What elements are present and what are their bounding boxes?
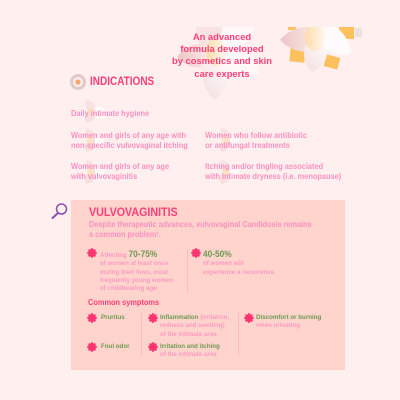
tagline heading: An advanced [193,30,251,42]
symptom: foul odor: Foul odor [100,342,129,350]
indication: vulvovaginitis: Women and girls of any age [71,162,169,170]
small flower 1 [85,99,105,123]
symptom: inflammation: Inflammation (irritation, [160,314,229,321]
symptom: foul odor [87,342,130,352]
indication: non-specific itching: non-specific vulvovaginal itching [71,140,188,150]
stat text: of childbearing age. [100,285,158,292]
stat text: of women will [203,260,244,267]
symptom: discomfort or burning [244,313,321,329]
panel: vulvovaginitis [71,200,345,370]
symptom: pruritus [87,313,124,323]
stat: 40-50% [191,248,276,276]
symptom: irritation and itching [148,342,220,358]
stat text: 40-50% [203,249,232,259]
indication: non-specific itching [71,130,188,150]
stat: 70-75% [87,248,173,292]
symptom: pruritus: Pruritus [100,314,124,321]
panel intro: a common problem¹. [89,230,161,238]
stat text: Affecting 70-75% [100,249,157,259]
flower: top right [280,23,363,72]
symptom: irritation and itching: Irritation and itching [160,342,220,350]
decorative flowers [84,27,362,184]
stat bullet [87,248,97,258]
icon: indications flower [70,74,86,90]
heading: common symptoms: Common symptoms [88,298,159,306]
indication: vulvovaginitis [71,162,169,180]
stat text: during their lives, most [100,269,168,276]
icon: magnifier [52,203,68,219]
symptom: inflammation [148,313,229,338]
stat text: experience a recurrence. [203,269,276,276]
panel intro: Despite therapeutic advances, vulvovaginal Candidosis remains [89,220,312,228]
flower: centre [177,27,259,100]
small flower 2 [85,128,105,152]
indication: dryness: with intimate dryness (i.e. menopause) [205,172,341,180]
tagline heading: formula developed [180,43,264,54]
small flower 3 [85,160,105,184]
symptom: discomfort or burning: when urinating [256,322,300,329]
symptom: irritation and itching: of the intimate area [160,351,217,358]
stat text: frequently young women [100,277,173,284]
heading: indications: INDICATIONS [90,75,154,88]
indication: vulvovaginitis: with vulvovaginitis [71,172,137,180]
stat text [203,249,276,276]
indication: antibiotic treatments: Women who follow antibiotic [205,130,307,140]
indication: non-specific itching: Women and girls of any age with [71,130,186,140]
stat text: of women at least once [100,260,168,267]
stat text [100,249,173,292]
indications list [71,109,341,180]
symptom: inflammation: redness and swelling) [160,322,225,329]
tagline heading [172,30,272,79]
tagline heading: care experts [194,68,250,79]
small flower 4 [220,128,240,152]
indication: dryness: Itching and/or tingling associated [205,162,323,170]
panel intro [89,220,312,238]
symptom: discomfort or burning: Discomfort or burning [256,314,321,321]
indication: daily hygiene: Daily intimate hygiene [71,109,149,118]
symptom: inflammation: of the intimate area [160,331,217,338]
panel heading: VULVOVAGINITIS [89,205,178,219]
indication: antibiotic treatments: or antifungal treatments [205,140,290,150]
indication: dryness [205,162,341,180]
stat bullet [191,248,201,258]
small flower 5 [220,160,240,184]
tagline heading: by cosmetics and skin [172,55,272,66]
indication: antibiotic treatments [205,130,307,150]
